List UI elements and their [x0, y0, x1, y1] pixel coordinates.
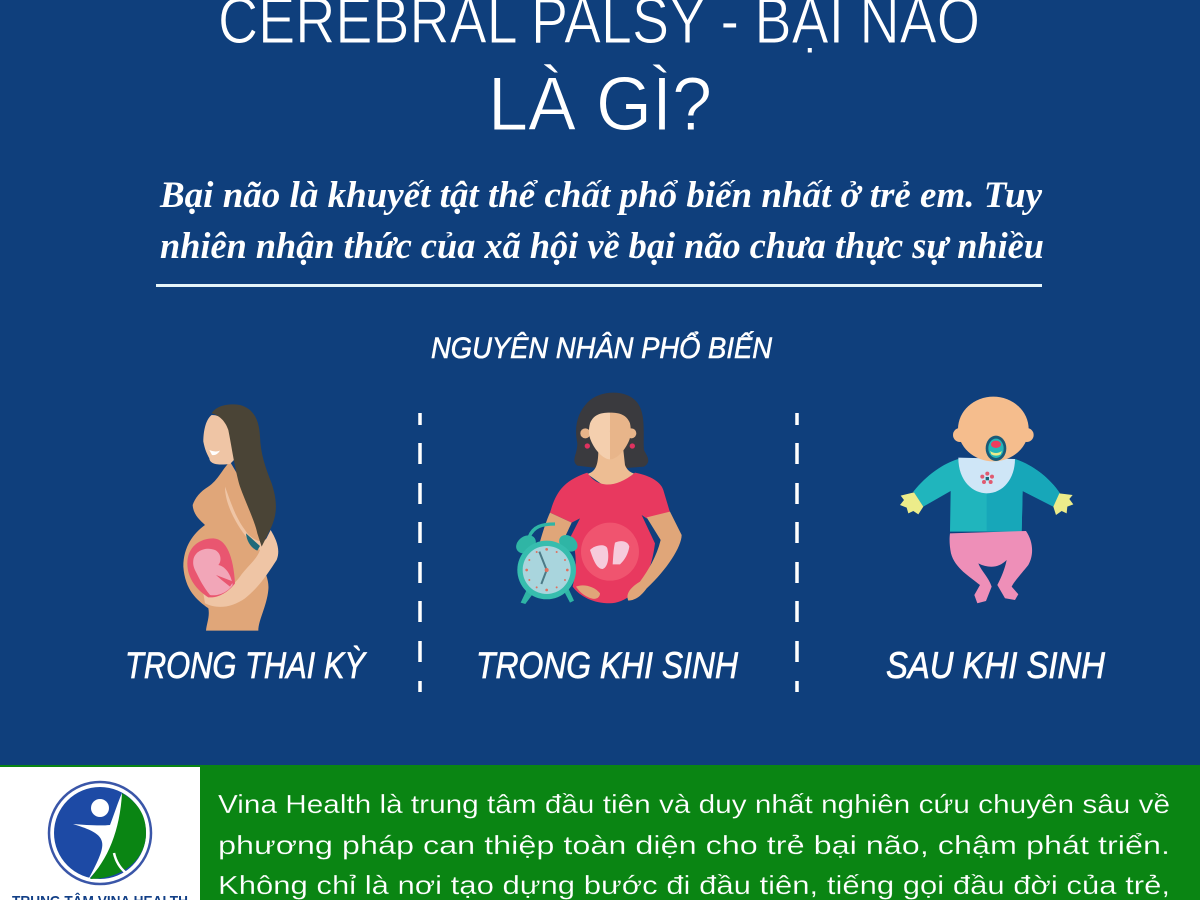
- column separators: [420, 413, 797, 692]
- arms: [540, 512, 682, 601]
- title: [218, 0, 980, 147]
- icon: baby with pacifier: [900, 397, 1073, 603]
- column labels: [125, 645, 1105, 686]
- column labels: SAU KHI SINH: [886, 645, 1105, 686]
- earrings: [585, 443, 635, 449]
- intro text: nhiên nhận thức của xã hội về bại não chưa thực sự nhiều: [160, 226, 1044, 267]
- pacifier: [986, 436, 1006, 461]
- intro text: Bại não là khuyết tật thể chất phổ biến nhất ở trẻ em. Tuy: [159, 175, 1043, 216]
- divider rule: [156, 284, 1042, 287]
- footer text: [218, 789, 1170, 900]
- logo: [49, 782, 151, 884]
- section heading: NGUYÊN NHÂN PHỔ BIẾN: [431, 331, 772, 365]
- icon: woman in labour with alarm clock: [513, 393, 682, 604]
- bib flower: [980, 472, 994, 484]
- alarm clock: [513, 524, 581, 604]
- footer text: phương pháp can thiệp toàn diện cho trẻ bại não, chậm phát triển.: [218, 830, 1170, 860]
- title: LÀ GÌ?: [488, 62, 712, 147]
- ears: [580, 428, 636, 438]
- column labels: TRONG THAI KỲ: [125, 645, 367, 686]
- footer text: Không chỉ là nơi tạo dựng bước đi đầu tiên, tiếng gọi đầu đời của trẻ,: [218, 870, 1170, 900]
- logo panel: [0, 767, 200, 900]
- intro text: [159, 175, 1044, 267]
- icon: pregnant woman: [183, 404, 278, 631]
- footer text: Vina Health là trung tâm đầu tiên và duy nhất nghiên cứu chuyên sâu về: [218, 789, 1170, 819]
- column labels: TRONG KHI SINH: [476, 645, 738, 686]
- footer band: [0, 765, 1200, 900]
